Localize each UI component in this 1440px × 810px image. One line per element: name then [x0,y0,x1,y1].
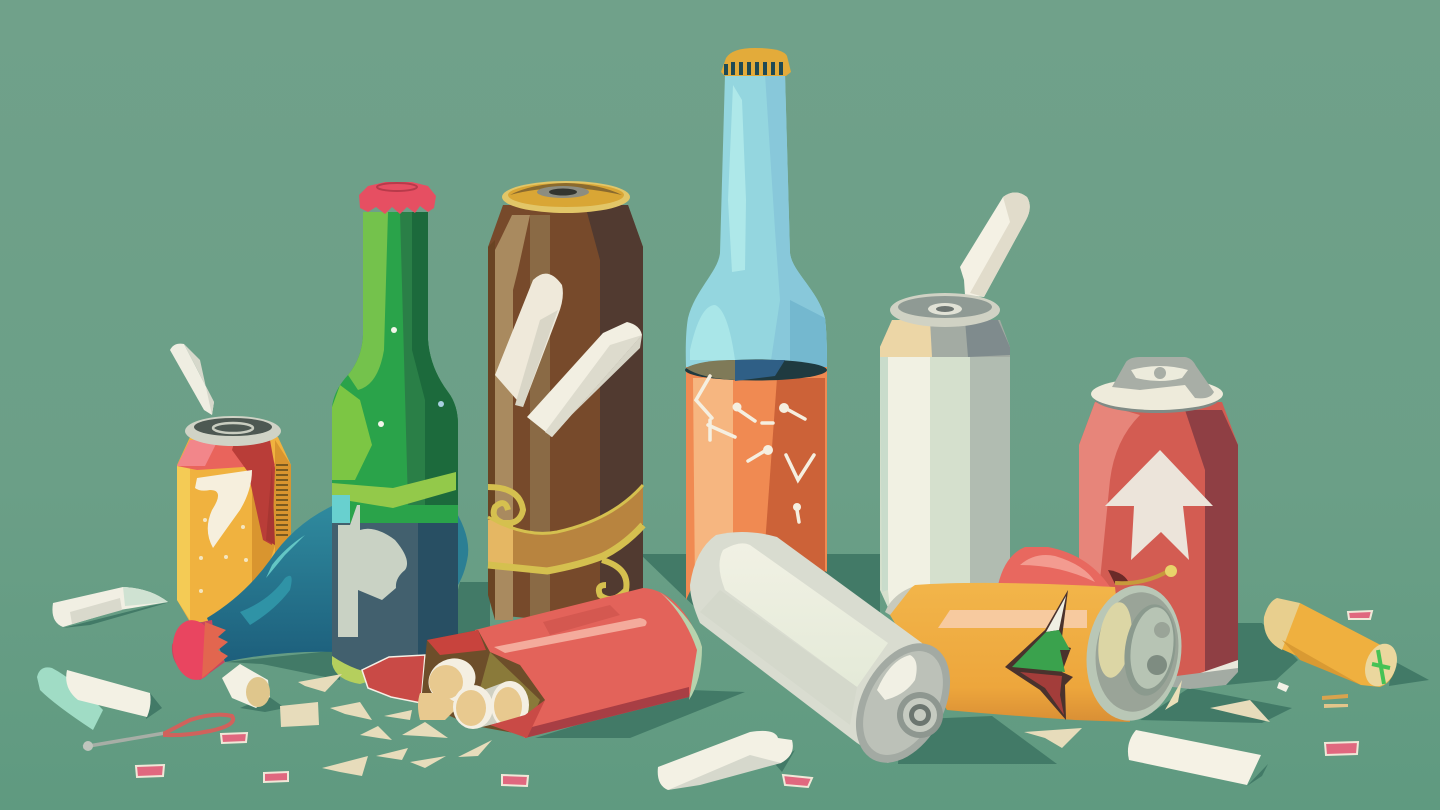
scissors handle [83,715,233,751]
white can [880,293,1010,612]
tiny scraps right [1277,682,1348,708]
white straw above white can [960,192,1030,297]
green bottle [332,182,458,684]
blue glass bottle with orange drink [685,48,827,600]
yellow lying can [885,579,1190,727]
fallen blue bottle with red cap [169,506,468,683]
white straw behind small can [170,344,214,415]
chalk sticks and white scraps [37,587,1261,790]
ground shadows [63,554,1429,786]
white lying can [690,532,969,779]
brown can [488,181,643,622]
small yellow can [177,416,291,622]
pink wrappers [136,611,1372,787]
paper debris [280,674,1270,776]
yellow capsule at right [1264,598,1403,691]
torn red lying can [362,588,702,738]
red can with arrow [1079,357,1238,689]
red apple-like can behind yellow can [998,547,1177,590]
